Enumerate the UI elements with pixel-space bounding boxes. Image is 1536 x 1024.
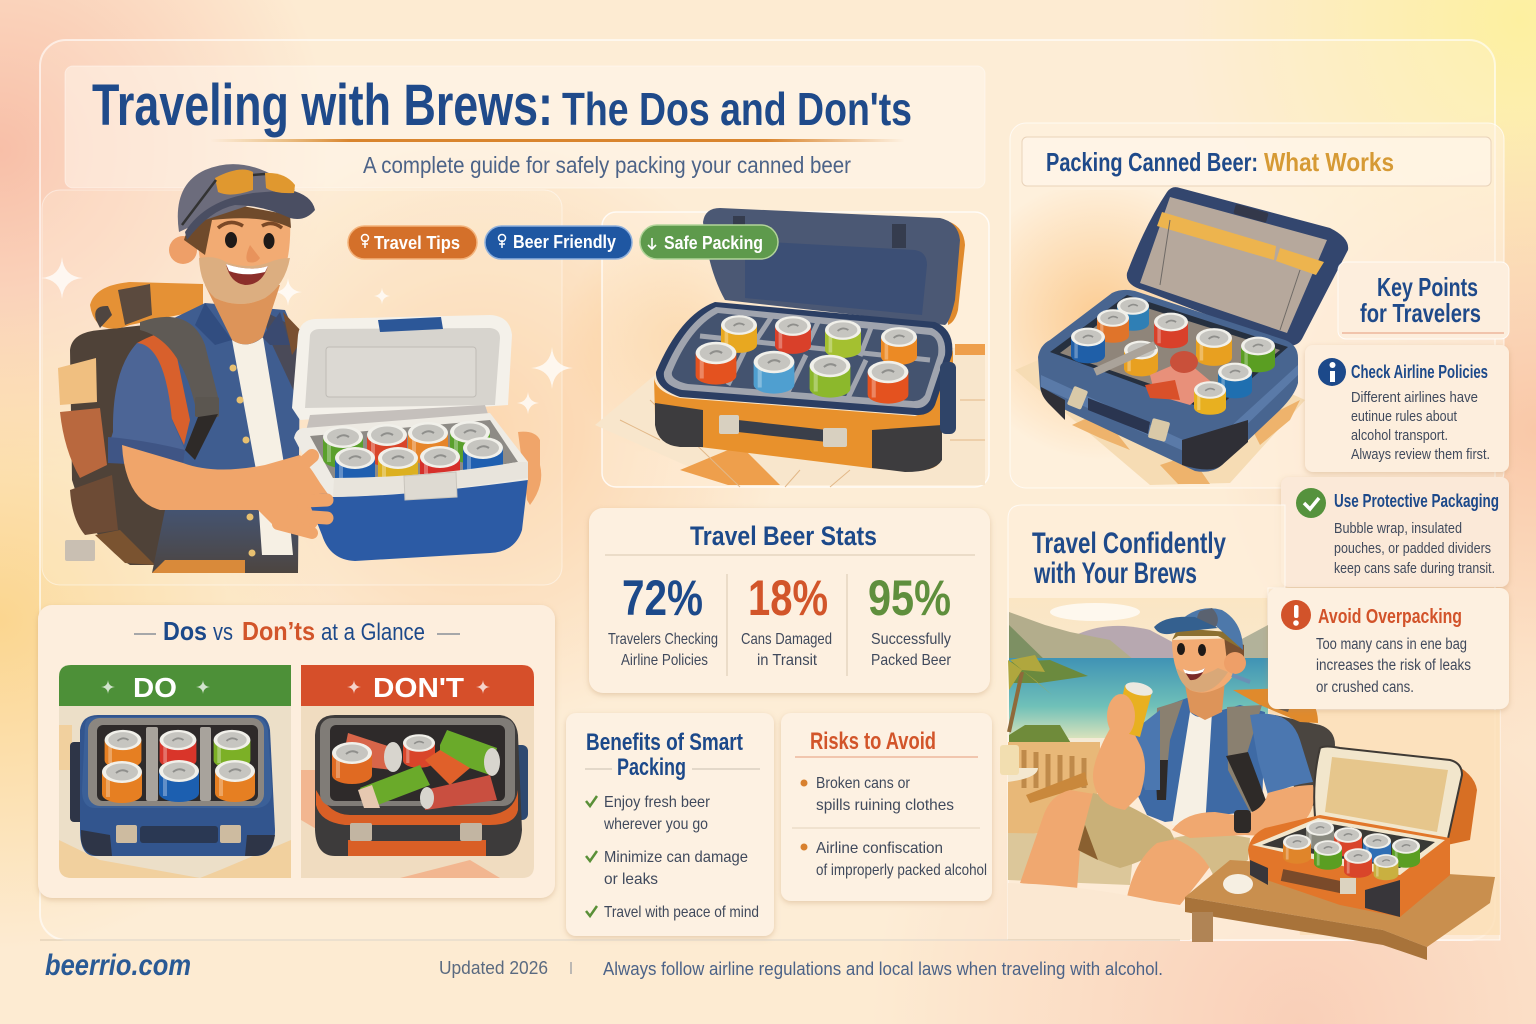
pill: Beer Friendly [485,226,632,259]
stat: 72%: Airline Policies [621,652,708,669]
column: DON'T [301,665,534,878]
panel: key points for travelers: for Travelers [1360,298,1481,328]
stat: 72%: Travelers Checking [608,631,718,648]
panel: travel beer stats [589,508,990,693]
panel: travel beer stats: Travel Beer Stats [690,521,877,551]
heading: packing canned beer: What Works [1264,147,1394,177]
risk list: of improperly packed alcohol [816,862,987,879]
title panel [65,66,985,188]
card: check airline policies [1305,345,1509,472]
card: check airline policies: Always review them first. [1351,446,1490,463]
card: avoid overpacking: Avoid Overpacking [1318,606,1462,628]
card: check airline policies: eutinue rules about [1351,408,1458,425]
stat: 18% [741,570,832,669]
brand: beerrio.com [45,949,191,982]
card: use protective packaging: pouches, or padded dividers [1334,540,1491,557]
icon: orange suitcase with cans [654,208,965,472]
pill: Travel Tips [348,226,477,259]
stat: 95%: 95% [868,570,951,626]
card: use protective packaging [1281,477,1509,587]
figure: relaxing traveler [1020,608,1335,905]
figure: smiling traveler [108,164,335,573]
card: check airline policies: Check Airline Policies [1351,362,1488,382]
heading: at a glance [134,616,460,646]
pill: Safe Packing [640,225,778,259]
panel: benefits of smart packing: Packing [617,754,686,781]
heading: at a glance: Don’ts [242,616,315,646]
benefit list: Enjoy fresh beer [604,794,711,811]
stat: 95%: Successfully [871,631,951,648]
panel: key points for travelers: Key Points [1377,272,1478,302]
benefit list: Minimize can damage [604,849,748,866]
icon: cooler with cans [258,315,541,561]
pill: Beer Friendly: Beer Friendly [513,232,616,252]
card: avoid overpacking: Too many cans in ene bag [1316,636,1467,653]
icon: info [1318,358,1346,386]
panel: hero traveler with cooler [41,164,573,585]
panel: risks to avoid: Risks to Avoid [810,728,936,755]
icon: overpacked orange suitcase [315,715,528,856]
title: The Dos and Don'ts [562,83,912,135]
card: avoid overpacking [1268,588,1509,709]
disclaimer: Always follow airline regulations and local laws when traveling with alcohol. [603,959,1163,979]
benefit list [586,794,759,921]
panel: what works [1010,123,1504,488]
risk list: spills ruining clothes [816,797,954,814]
panel: key points for travelers [1338,262,1509,339]
heading: at a glance: vs [213,619,233,646]
heading: travel confidently [1023,527,1226,591]
heading: packing canned beer: Packing Canned Beer: [1046,147,1258,177]
icon: blue suitcase with cans [1038,187,1348,472]
icon: backpack [58,282,210,565]
risk list: Airline confiscation [816,840,943,857]
panel: orange suitcase illustration [595,208,989,487]
pills [348,225,778,259]
illustration: beach view [1000,598,1268,885]
icon: check [1296,488,1326,518]
heading: travel confidently: with Your Brews [1033,557,1197,590]
benefit list: Travel with peace of mind [604,904,759,921]
pill: Travel Tips: Travel Tips [374,233,460,253]
benefit list: or leaks [604,871,658,888]
icon: picnic cloth [595,344,985,487]
heading: travel confidently: Travel Confidently [1032,527,1226,560]
column: DO: DO [133,672,177,703]
heading: at a glance: Dos [163,616,207,646]
card: use protective packaging: Bubble wrap, insulated [1334,520,1462,537]
panel: travel confidently scene [1000,505,1500,960]
footer [40,940,1180,982]
card: check airline policies: alcohol transport. [1351,427,1448,444]
pill: Safe Packing: Safe Packing [664,233,763,253]
benefit list: wherever you go [603,816,708,833]
stat: 18%: Cans Damaged [741,631,832,648]
subtitle: A complete guide for safely packing your canned beer [363,152,851,178]
stat: 18%: 18% [748,570,828,626]
stat: 18%: in Transit [757,652,818,669]
card: use protective packaging: keep cans safe during transit. [1334,560,1495,577]
icon: table [1185,860,1495,960]
stat: 95%: Packed Beer [871,652,952,669]
panel: benefits of smart packing: Benefits of Smart [586,729,743,756]
panel: benefits of smart packing [566,713,774,936]
card: avoid overpacking: increases the risk of leaks [1316,657,1471,674]
stat: 95% [868,570,952,669]
card: check airline policies: Different airlines have [1351,389,1478,406]
icon: warning [1281,600,1311,630]
icon: orange suitcase with cans small [1248,746,1477,917]
stat: 72% [608,570,718,669]
column: DO [59,665,291,878]
risk list: Broken cans or [816,775,911,792]
updated: Updated 2026 [439,958,548,978]
column: DON'T: DON'T [373,672,464,703]
panel: dos vs don'ts [38,605,555,898]
icon: neat blue suitcase [70,715,275,856]
floor foreground [1008,883,1190,940]
stat: 72%: 72% [622,570,703,626]
risk list [800,775,987,879]
title: Traveling with Brews: [92,73,553,138]
icon: checkered cloth [1015,320,1305,485]
heading: packing canned beer [1022,137,1491,186]
panel: risks to avoid [781,713,992,901]
card: avoid overpacking: or crushed cans. [1316,679,1414,696]
heading: at a glance: at a Glance [321,619,425,646]
